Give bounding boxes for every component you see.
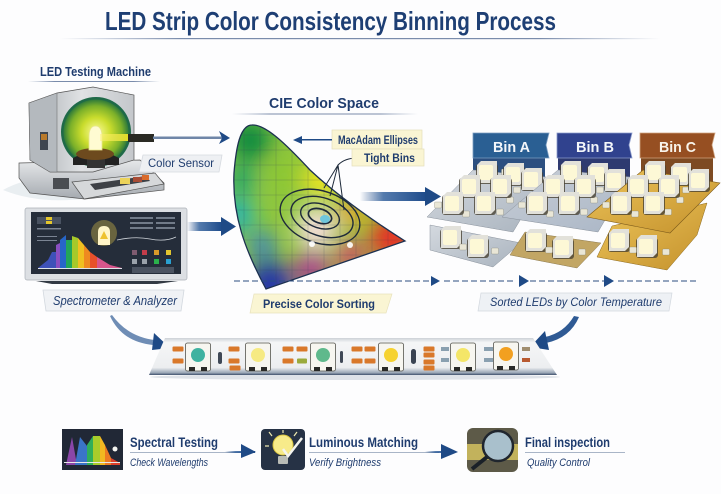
label: Precise Color Sorting: Precise Color Sorting [263, 297, 375, 311]
LED: pale yellow [246, 343, 270, 371]
label: Color Sensor: Color Sensor [148, 156, 214, 170]
panel: Bin A: Bin A [493, 139, 530, 156]
arrow: analyzer to strip [110, 315, 170, 350]
panel: Bin B: Bin B [576, 139, 614, 156]
panel: spectrometer screen [25, 208, 187, 284]
icon: luminous matching bulb [261, 429, 305, 470]
label: Sorted LEDs by Color Temperature: Sorted LEDs by Color Temperature [490, 295, 662, 309]
LED: yellow [378, 343, 404, 371]
board: upper A [427, 161, 546, 232]
icon: final inspection magnifier [467, 428, 518, 472]
icon: spectral testing [62, 429, 123, 470]
panel: Bin C: Bin C [659, 139, 696, 156]
title: LED Strip Color Consistency Binning Process [105, 6, 556, 36]
MacAdam ellipses [273, 180, 367, 254]
arrow: MacAdam pointer [293, 136, 332, 144]
LED: orange [494, 342, 518, 370]
chart: CIE color space diagram [233, 124, 406, 290]
icon: LED testing machine [3, 87, 164, 200]
arrow: sorted LEDs to strip [530, 316, 579, 350]
text: Spectral Testing [130, 434, 245, 469]
LED: teal [186, 343, 210, 371]
panel: Bin C [640, 133, 715, 183]
panel: Bin A [473, 133, 549, 180]
label: Tight Bins [352, 149, 424, 166]
text: Spectral Testing: Spectral Testing [130, 434, 218, 450]
arrow: step 1 to 2 [225, 444, 256, 458]
arrow: analyzer to CIE [187, 217, 236, 236]
text: Luminous Matching: Verify Brightness [309, 457, 381, 469]
label: Precise Color Sorting [250, 294, 392, 313]
heading: CIE Color Space: CIE Color Space [269, 95, 379, 112]
board: upper B [502, 161, 630, 232]
chart: emission spectrum [38, 235, 122, 269]
label: Spectrometer & Analyzer: Spectrometer & Analyzer [53, 294, 178, 308]
arrow: CIE to bins [360, 187, 441, 206]
dashed flow arrows [234, 275, 696, 287]
board: lower B [510, 229, 601, 268]
arrow: sensor to CIE [153, 131, 230, 144]
text: Luminous Matching [309, 434, 439, 469]
label: MacAdam Ellipses [332, 130, 422, 149]
label: MacAdam Ellipses: MacAdam Ellipses [338, 135, 418, 147]
label: Tight Bins: Tight Bins [364, 153, 415, 165]
text: Final inspection [525, 434, 625, 469]
text: Final inspection: Quality Control [527, 457, 590, 469]
LED: green-teal [310, 343, 336, 371]
LED strip [149, 338, 560, 380]
bin boards: sorted LEDs [427, 161, 720, 270]
label: Color Sensor [139, 155, 222, 172]
LED: light yellow [450, 343, 476, 371]
label: Spectrometer & Analyzer [43, 290, 184, 311]
text: Luminous Matching: Luminous Matching [309, 434, 418, 450]
heading: LED Testing Machine: LED Testing Machine [40, 65, 151, 79]
board: upper C [587, 161, 720, 233]
arrow: step 2 to 3 [425, 444, 458, 459]
board: lower C [597, 203, 707, 270]
text: Final inspection: Final inspection [525, 434, 610, 450]
text: Spectral Testing: Check Wavelengths [130, 457, 208, 469]
board: lower A [430, 225, 521, 267]
panel: Bin B [557, 133, 632, 180]
